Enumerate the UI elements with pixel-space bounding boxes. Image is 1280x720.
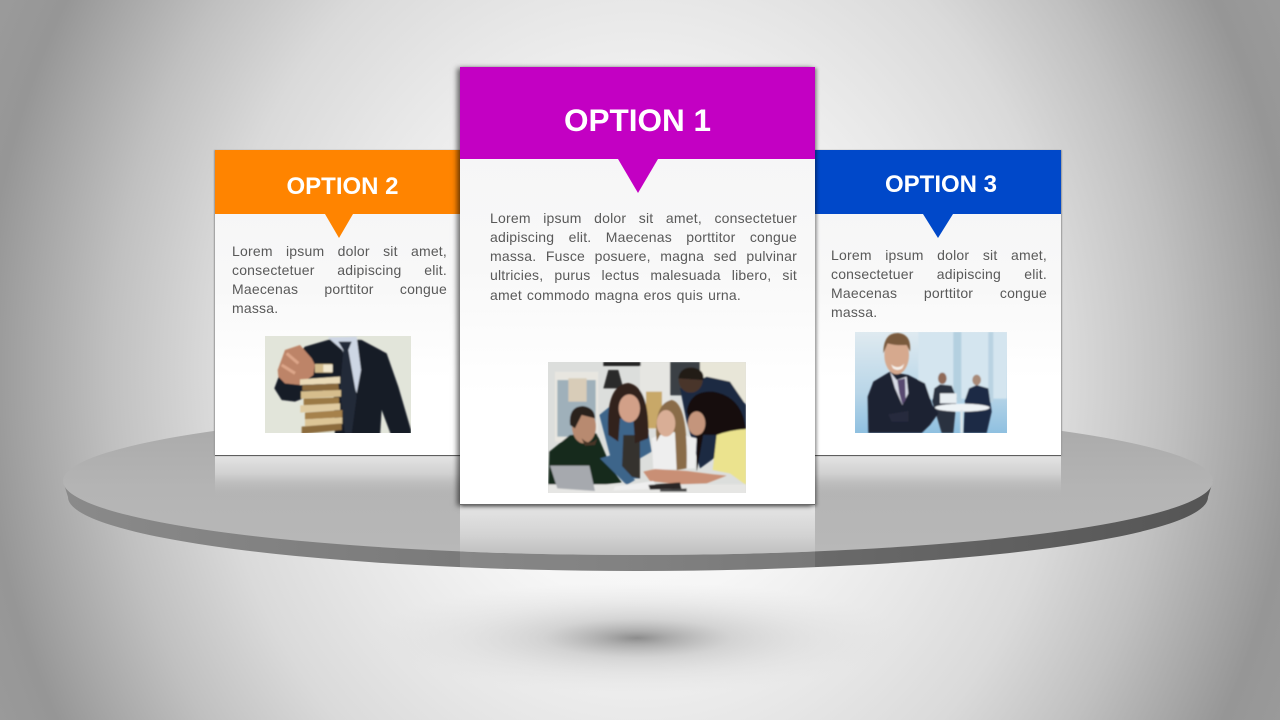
option 1 text: Lorem ipsum dolor sit amet, consectetuer — [490, 210, 797, 226]
option 2 text: massa. — [232, 300, 278, 316]
option 2 header — [215, 150, 461, 214]
option 2 header: OPTION 2 — [286, 173, 399, 200]
option 1 text: ultricies, purus lectus malesuada libero, sit — [490, 267, 797, 283]
option 1 header: OPTION 1 — [564, 102, 711, 138]
option 2 photo: hand stacking wooden blocks — [265, 336, 411, 433]
option 3 text — [831, 247, 1047, 320]
option 2 text: Lorem ipsum dolor sit amet, — [232, 243, 447, 259]
option 2 text: consectetuer adipiscing elit. — [232, 262, 447, 278]
panel: option 1 — [460, 67, 815, 505]
option 3 header: OPTION 3 — [885, 171, 997, 198]
panel: option 3 — [814, 150, 1061, 456]
option 3 text: massa. — [831, 304, 877, 320]
panel: option 2 — [215, 150, 461, 456]
option 3 text: Lorem ipsum dolor sit amet, — [831, 247, 1047, 263]
option 1 text: massa. Fusce posuere, magna sed pulvinar — [490, 248, 797, 264]
option 1 header — [460, 67, 815, 159]
option 3 text: consectetuer adipiscing elit. — [831, 266, 1047, 282]
option 3 pointer — [923, 214, 953, 238]
option 1 text: adipiscing elit. Maecenas porttitor congue — [490, 229, 797, 245]
option 2 text — [232, 243, 447, 316]
option 1 pointer — [618, 159, 658, 193]
option 1 photo: team around a table — [548, 362, 746, 493]
option 3 photo: smiling businessman — [855, 332, 1007, 433]
option 3 header — [814, 150, 1061, 214]
option 1 text: amet commodo magna eros quis urna. — [490, 287, 741, 303]
option 2 text: Maecenas porttitor congue — [232, 281, 447, 297]
option 2 pointer — [325, 214, 353, 238]
option 3 text: Maecenas porttitor congue — [831, 285, 1047, 301]
platform disc — [65, 431, 1212, 571]
option 1 text — [490, 210, 797, 303]
